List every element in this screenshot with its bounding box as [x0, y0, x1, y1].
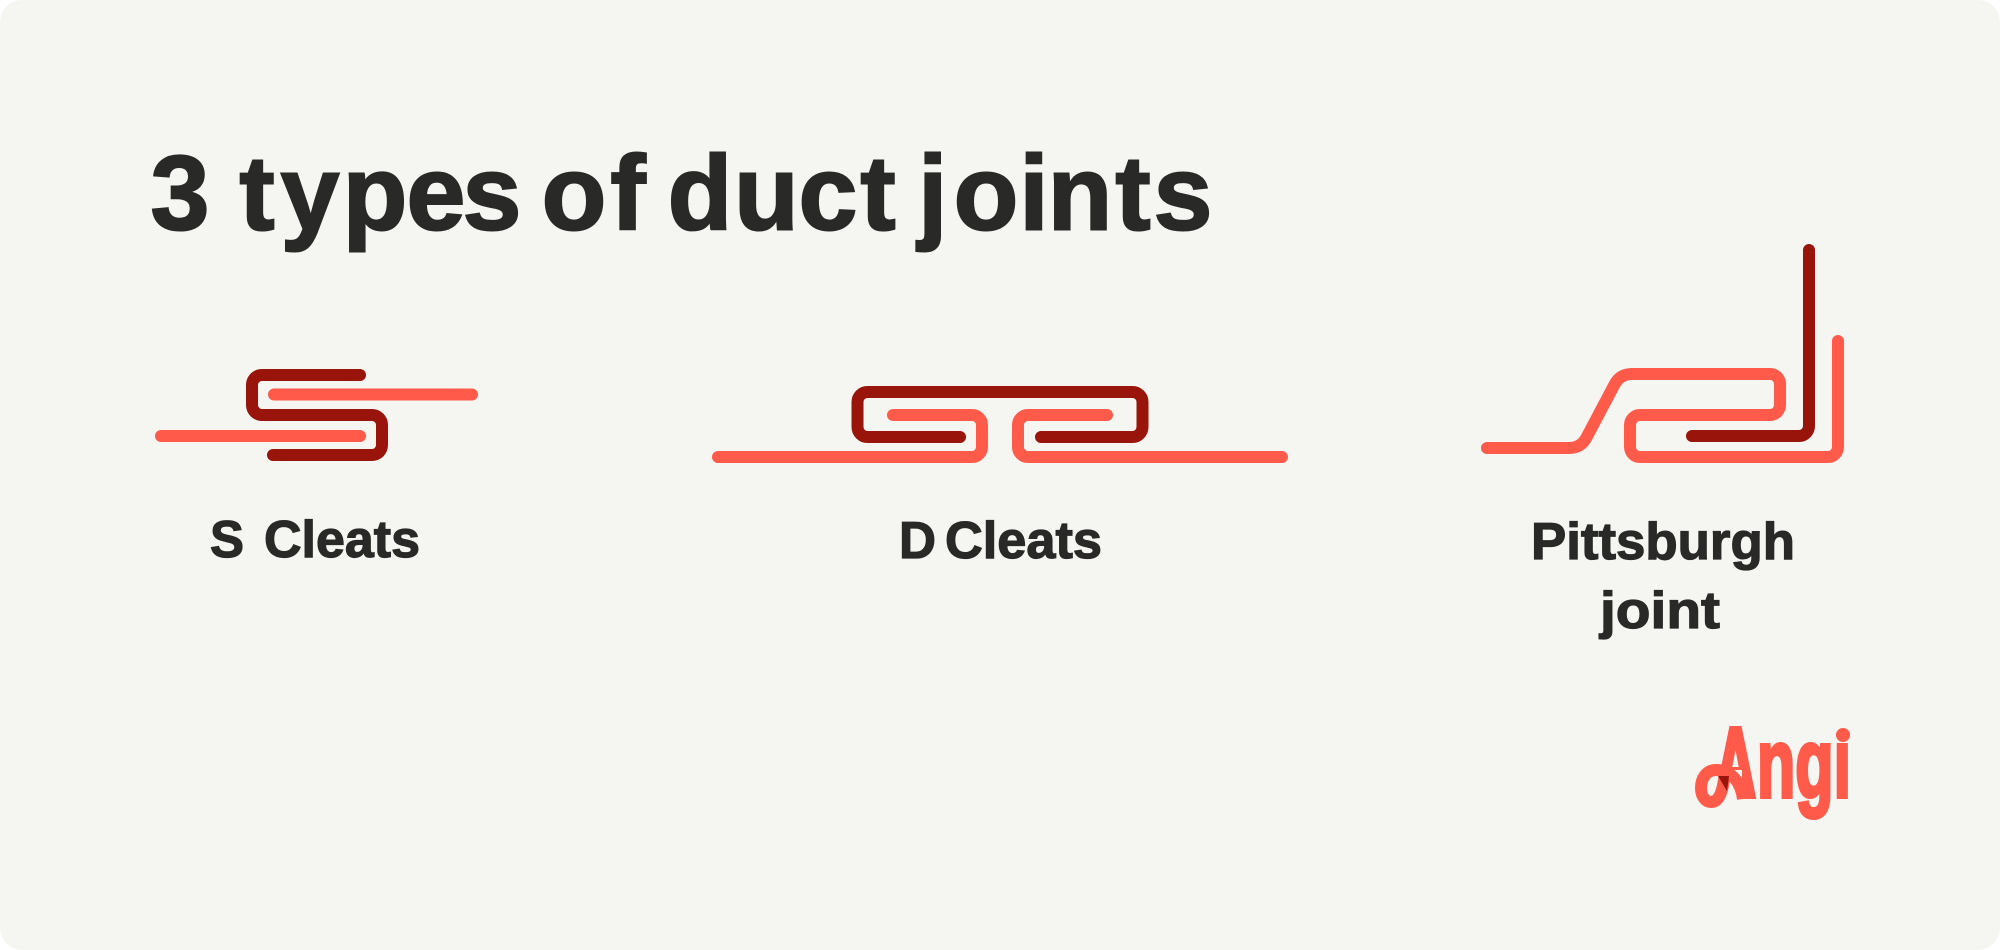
logo: Angi: A [1715, 709, 1756, 821]
diagram: S cleats [161, 375, 472, 455]
title: types [239, 134, 521, 252]
logo: Angi: ngi [1757, 708, 1851, 818]
title: of [542, 134, 646, 252]
title [150, 134, 1212, 252]
logo: Angi [1695, 726, 1850, 820]
diagram: Pittsburgh joint [1487, 250, 1838, 457]
title: duct [668, 134, 896, 252]
label: S Cleats: S [210, 511, 244, 569]
title: joints [916, 134, 1212, 252]
label: D Cleats: Cleats [945, 512, 1102, 570]
diagram: D cleats [718, 392, 1282, 457]
label: Pittsburgh joint: joint [1599, 582, 1720, 640]
label: Pittsburgh joint [1531, 513, 1795, 640]
title: 3 [150, 134, 209, 252]
label: Pittsburgh joint: Pittsburgh [1531, 513, 1795, 571]
label: S Cleats: Cleats [264, 511, 420, 569]
label: D Cleats: D [899, 512, 936, 570]
